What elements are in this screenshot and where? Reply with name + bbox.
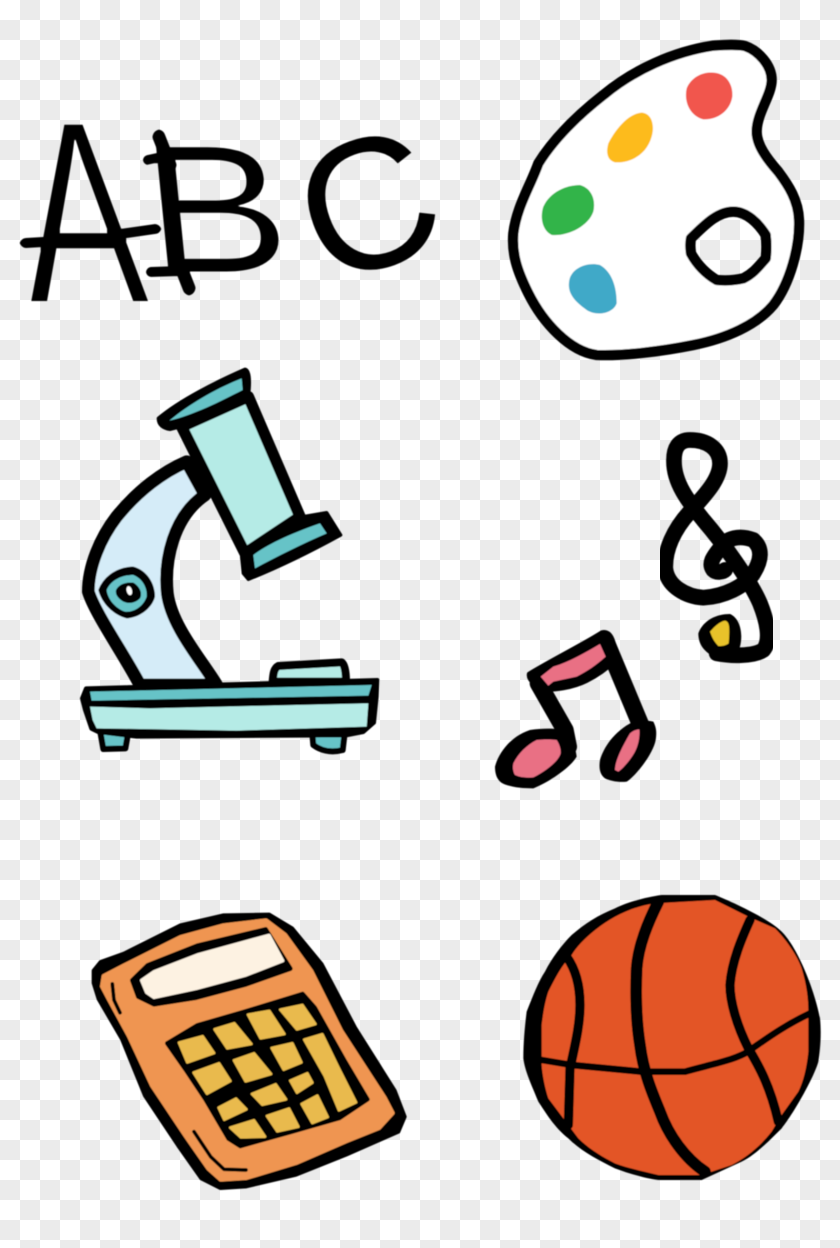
clef yellow dot (710, 621, 729, 646)
clef head (698, 614, 741, 658)
display (142, 935, 283, 997)
letter C: C (269, 85, 466, 326)
right note head (600, 720, 656, 782)
icon: calculator (94, 915, 405, 1188)
icon: basketball (523, 895, 821, 1180)
left note head (495, 729, 577, 788)
ball outline (523, 895, 821, 1180)
display frame (132, 929, 290, 1004)
icon: treble clef (665, 440, 768, 658)
red paint (686, 73, 732, 119)
microscope base (82, 680, 377, 737)
beam (528, 631, 615, 690)
blue paint (569, 264, 617, 313)
stage block (273, 662, 346, 682)
ball seams (542, 902, 810, 1172)
top eyepiece (158, 369, 249, 429)
lower lens flange (242, 513, 341, 579)
icon: music notes (495, 631, 656, 788)
letter A: A (7, 66, 156, 359)
right foot (312, 730, 345, 751)
ball surface (542, 900, 808, 1175)
palette body with thumb hole (513, 45, 799, 355)
icon: hand-lettered ABC (7, 66, 466, 359)
yellow paint (607, 113, 653, 162)
icon: microscope (82, 369, 377, 751)
microscope arm (88, 462, 217, 685)
letter B: B (133, 108, 299, 311)
side marks (112, 984, 246, 1170)
keypad (167, 994, 367, 1146)
objective tube (182, 397, 300, 553)
focus knob (98, 567, 155, 618)
clef stroke (665, 440, 768, 655)
left foot (100, 730, 129, 749)
icon: paint palette (513, 45, 799, 355)
green paint (542, 185, 594, 235)
note stems (538, 643, 647, 747)
calculator outline (94, 915, 405, 1188)
calculator body (102, 920, 393, 1180)
